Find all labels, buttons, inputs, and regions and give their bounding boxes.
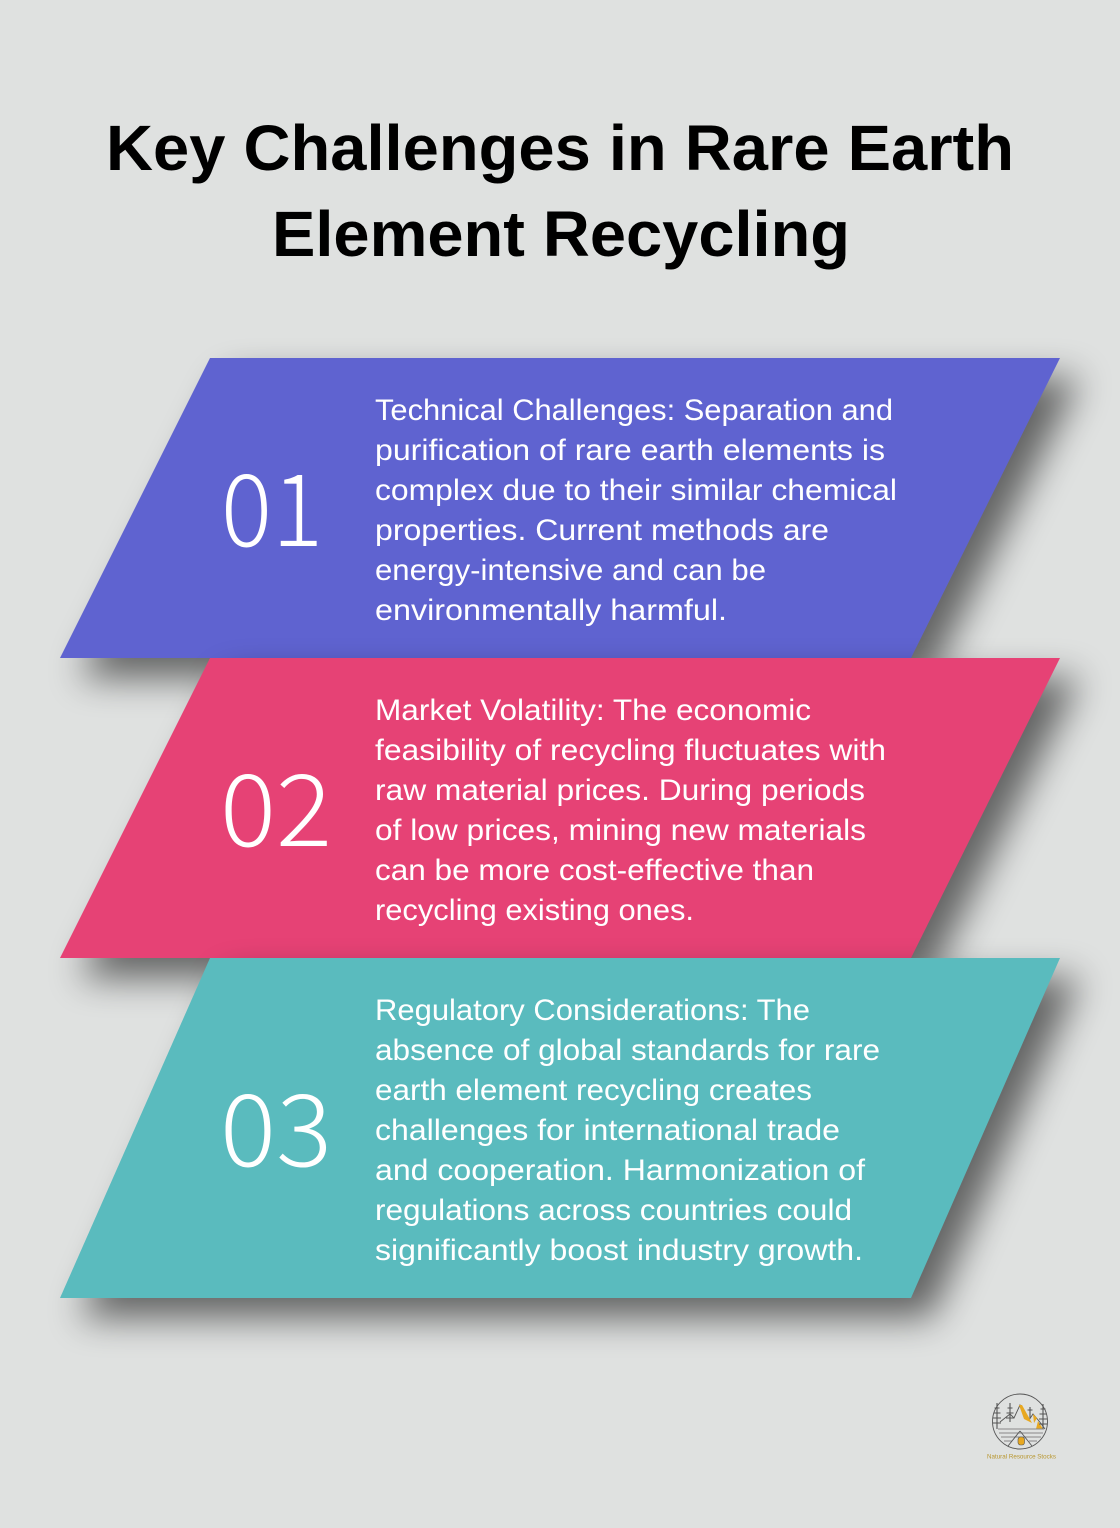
panel: technical challenges — [60, 358, 1060, 658]
text: technical challenges: environmentally harmful. — [375, 594, 727, 627]
text: regulatory considerations: challenges for international trade — [375, 1114, 840, 1147]
blue parallelogram — [60, 358, 1060, 658]
title — [106, 112, 1014, 270]
text: technical challenges — [375, 394, 897, 627]
text: market volatility: feasibility of recycling fluctuates with — [375, 734, 886, 767]
text: technical challenges: complex due to their similar chemical — [375, 474, 897, 507]
text: technical challenges: energy-intensive and can be — [375, 554, 766, 587]
title: Element Recycling — [272, 198, 850, 270]
text: regulatory considerations: significantly boost industry growth. — [375, 1234, 863, 1267]
panel: regulatory considerations — [60, 958, 1060, 1298]
icon: mountain badge — [992, 1394, 1048, 1449]
text: regulatory considerations: absence of global standards for rare — [375, 1034, 880, 1067]
text: regulatory considerations: earth element recycling creates — [375, 1074, 812, 1107]
number 03: 03 — [220, 1050, 332, 1195]
text: regulatory considerations: regulations across countries could — [375, 1194, 852, 1227]
text: technical challenges: properties. Current methods are — [375, 514, 829, 547]
text: regulatory considerations: and cooperation. Harmonization of — [375, 1154, 866, 1187]
teal parallelogram — [60, 958, 1060, 1298]
number 02: 02 — [220, 730, 332, 875]
logo wordmark: Natural Resource Stocks — [987, 1454, 1056, 1460]
logo: natural resource stocks — [987, 1394, 1056, 1460]
text: market volatility: can be more cost-effective than — [375, 854, 814, 887]
text: market volatility: raw material prices. During periods — [375, 774, 865, 807]
text: regulatory considerations — [375, 994, 880, 1267]
text: technical challenges: Technical Challenges: Separation and — [375, 394, 893, 427]
pink parallelogram — [60, 658, 1060, 958]
text: market volatility: of low prices, mining new materials — [375, 814, 866, 847]
text: market volatility: recycling existing ones. — [375, 894, 694, 927]
text: technical challenges: purification of rare earth elements is — [375, 434, 885, 467]
text: regulatory considerations: Regulatory Considerations: The — [375, 994, 810, 1027]
text: market volatility — [375, 694, 886, 927]
number 01: 01 — [221, 430, 323, 575]
panel: market volatility — [60, 658, 1060, 958]
title: Key Challenges in Rare Earth — [106, 112, 1014, 184]
text: market volatility: Market Volatility: The economic — [375, 694, 811, 727]
